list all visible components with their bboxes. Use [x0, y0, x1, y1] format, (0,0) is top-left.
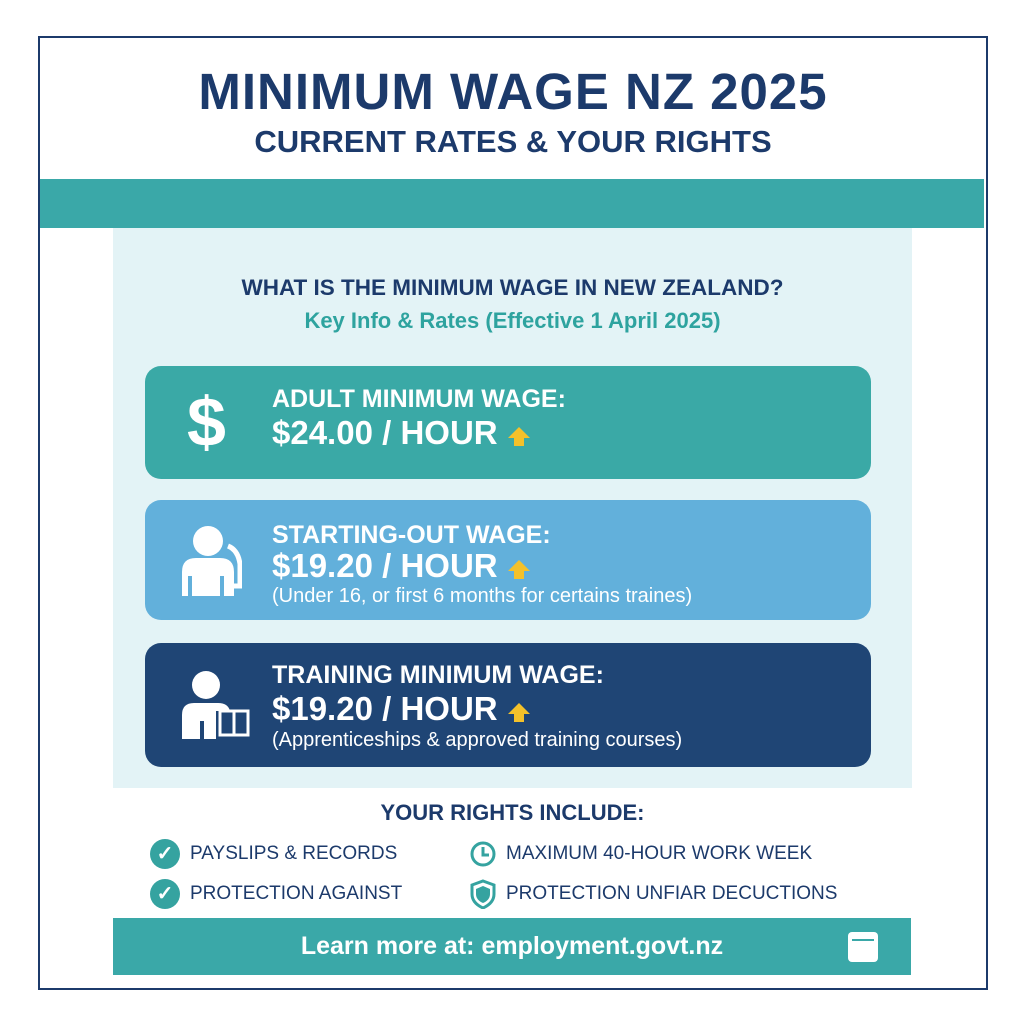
icon: dollar: $ — [187, 383, 226, 461]
teal band — [40, 179, 984, 228]
icon: person with book — [182, 671, 250, 739]
right: protection against: PROTECTION AGAINST — [190, 883, 402, 904]
card: training: TRAINING MINIMUM WAGE: — [272, 661, 604, 689]
icon: person — [182, 526, 242, 596]
card: training: (Apprenticeships & approved training courses) — [272, 729, 682, 751]
right: payslips — [150, 839, 397, 869]
card: training — [145, 643, 871, 767]
subtitle: CURRENT RATES & YOUR RIGHTS — [254, 124, 772, 159]
footer text: Learn more at: employment.govt.nz — [301, 932, 723, 960]
title: MINIMUM WAGE NZ 2025 — [198, 63, 828, 120]
panel subheading: Key Info & Rates (Effective 1 April 2025) — [304, 308, 721, 333]
right: deductions — [470, 879, 837, 909]
panel: rates — [113, 228, 912, 788]
footer bar — [113, 918, 911, 975]
right: max hours: MAXIMUM 40-HOUR WORK WEEK — [506, 843, 812, 864]
card: starting-out: STARTING-OUT WAGE: — [272, 521, 551, 549]
rights heading: YOUR RIGHTS INCLUDE: — [380, 800, 644, 825]
icon: browser — [848, 932, 878, 962]
card: starting-out: $19.20 / HOUR — [272, 547, 498, 584]
right: protection against: ✓ — [157, 883, 173, 905]
right: payslips: PAYSLIPS & RECORDS — [190, 843, 397, 864]
panel heading: WHAT IS THE MINIMUM WAGE IN NEW ZEALAND? — [241, 275, 784, 300]
card: adult — [145, 366, 871, 479]
card: training: $19.20 / HOUR — [272, 690, 498, 727]
card: starting-out — [145, 500, 871, 620]
card: starting-out: (Under 16, or first 6 months for certains traines) — [272, 585, 692, 607]
right: deductions: PROTECTION UNFIAR DECUCTIONS — [506, 883, 837, 904]
right: protection against — [150, 879, 402, 909]
card: adult: ADULT MINIMUM WAGE: — [272, 385, 566, 413]
card: adult: $24.00 / HOUR — [272, 414, 498, 451]
right: payslips: ✓ — [157, 843, 173, 865]
